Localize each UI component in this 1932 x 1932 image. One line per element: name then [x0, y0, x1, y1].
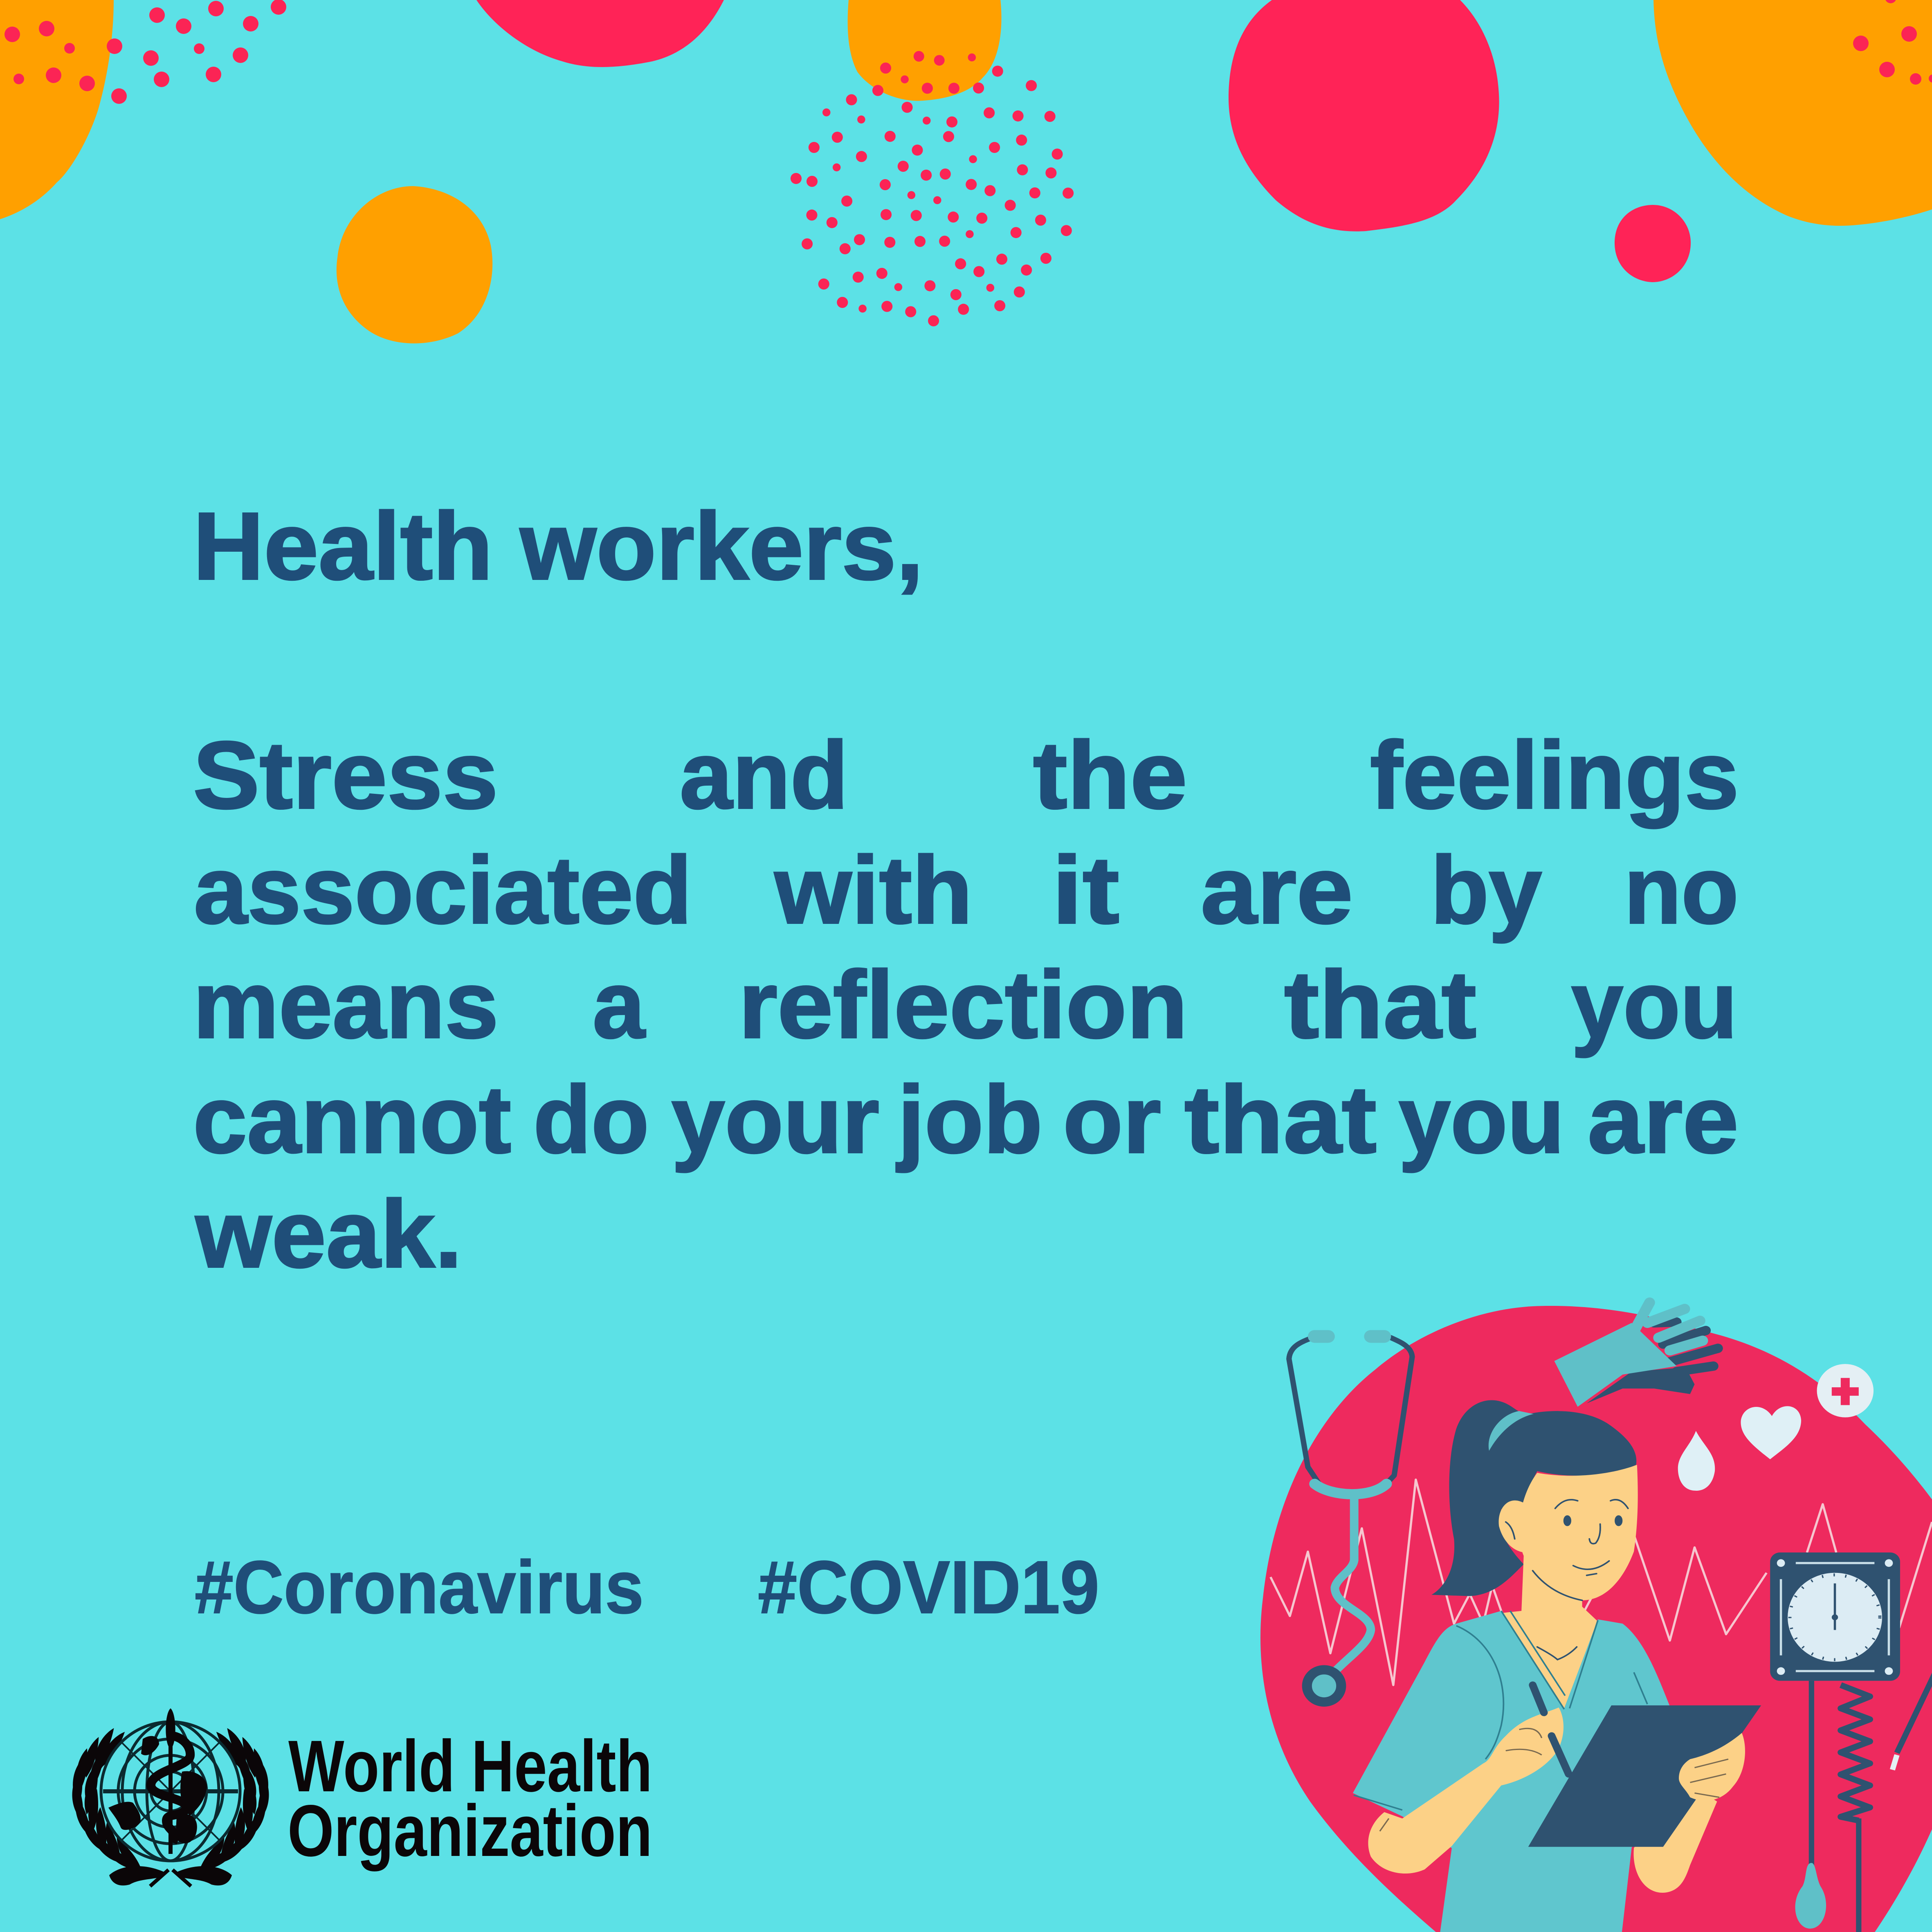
- line 3: reflection: [739, 951, 1188, 1058]
- line 1: feelings: [1370, 721, 1739, 829]
- hair tie: [1489, 1411, 1534, 1451]
- line 1: the: [1033, 721, 1187, 829]
- line 4: cannot: [193, 1066, 511, 1173]
- blob: top-left orange: [0, 0, 114, 219]
- blob and dots: centre top cluster: [791, 0, 1074, 326]
- ear: [1498, 1501, 1525, 1552]
- dots: top-right cluster: [1853, 0, 1932, 85]
- continents: [108, 1736, 207, 1843]
- body paragraph: [193, 721, 1739, 1287]
- hashtag: Coronavirus: #Coronavirus: [195, 1545, 644, 1629]
- blob: lower-left orange: [337, 186, 492, 344]
- clipboard: [1528, 1705, 1761, 1847]
- heading: Health workers,: [193, 492, 923, 600]
- line 5: weak.: [195, 1180, 462, 1287]
- dots: top-left cluster: [4, 0, 286, 104]
- line 4: you: [1399, 1066, 1564, 1173]
- line 4: are: [1588, 1066, 1739, 1173]
- line 2: associated: [194, 836, 692, 944]
- blob: top-right orange: [1653, 0, 1932, 226]
- icon: blood drop: [1678, 1431, 1715, 1491]
- logo: World Health wordmark: Organization: [288, 1790, 652, 1871]
- ECG line: [1271, 1480, 1932, 1685]
- line 2: [194, 836, 1739, 944]
- facial features: [1506, 1500, 1628, 1660]
- line 2: are: [1201, 836, 1353, 944]
- line 3: you: [1571, 951, 1737, 1058]
- line 2: it: [1052, 836, 1119, 944]
- line 1: and: [680, 721, 848, 829]
- line 4: [193, 1066, 1739, 1173]
- logo: WHO emblem: [68, 1708, 273, 1886]
- nurse figure: [1353, 1400, 1761, 1932]
- line 4: do: [533, 1066, 649, 1173]
- line 2: by: [1431, 836, 1542, 944]
- pen: [1533, 1685, 1569, 1774]
- ribbon: [109, 1866, 232, 1885]
- line 1: Stress: [193, 721, 498, 829]
- snake: [151, 1735, 190, 1842]
- right hand: [1679, 1733, 1745, 1801]
- line 2: no: [1624, 836, 1739, 944]
- finger lines: [1380, 1728, 1728, 1831]
- line 3: [193, 951, 1737, 1058]
- right arm: [1633, 1776, 1717, 1893]
- glove: [1554, 1303, 1718, 1407]
- hair: [1431, 1400, 1636, 1596]
- scrub seams: [1354, 1611, 1647, 1810]
- line 3: a: [593, 951, 646, 1058]
- scrubs: [1353, 1611, 1670, 1932]
- logo: World Health wordmark: [288, 1725, 652, 1871]
- face: [1519, 1465, 1638, 1600]
- line 4: that: [1184, 1066, 1377, 1173]
- blob: large red: [1229, 0, 1499, 231]
- blob: top red: [476, 0, 724, 67]
- stethoscope: [1289, 1337, 1412, 1702]
- blood pressure monitor: [1770, 1552, 1932, 1932]
- icon: heart: [1741, 1406, 1801, 1459]
- hashtag: COVID19: #COVID19: [758, 1545, 1099, 1629]
- blob: small red: [1615, 205, 1691, 282]
- neck: [1501, 1556, 1598, 1708]
- left arm and hand: [1368, 1707, 1564, 1874]
- logo: World Health wordmark: World Health: [288, 1725, 652, 1807]
- line 4: or: [1063, 1066, 1161, 1173]
- icon: medical cross badge: [1817, 1364, 1874, 1418]
- red backdrop: [1260, 1306, 1932, 1932]
- line 4: your: [672, 1066, 879, 1173]
- rod: [166, 1708, 175, 1854]
- globe: [101, 1722, 240, 1861]
- line 2: with: [774, 836, 973, 944]
- line 3: means: [193, 951, 499, 1058]
- illustration: nurse with medical items: [1260, 1303, 1932, 1932]
- line 1: [193, 721, 1739, 829]
- wreath: [68, 1725, 273, 1875]
- line 3: that: [1284, 951, 1476, 1058]
- line 4: job: [896, 1066, 1042, 1173]
